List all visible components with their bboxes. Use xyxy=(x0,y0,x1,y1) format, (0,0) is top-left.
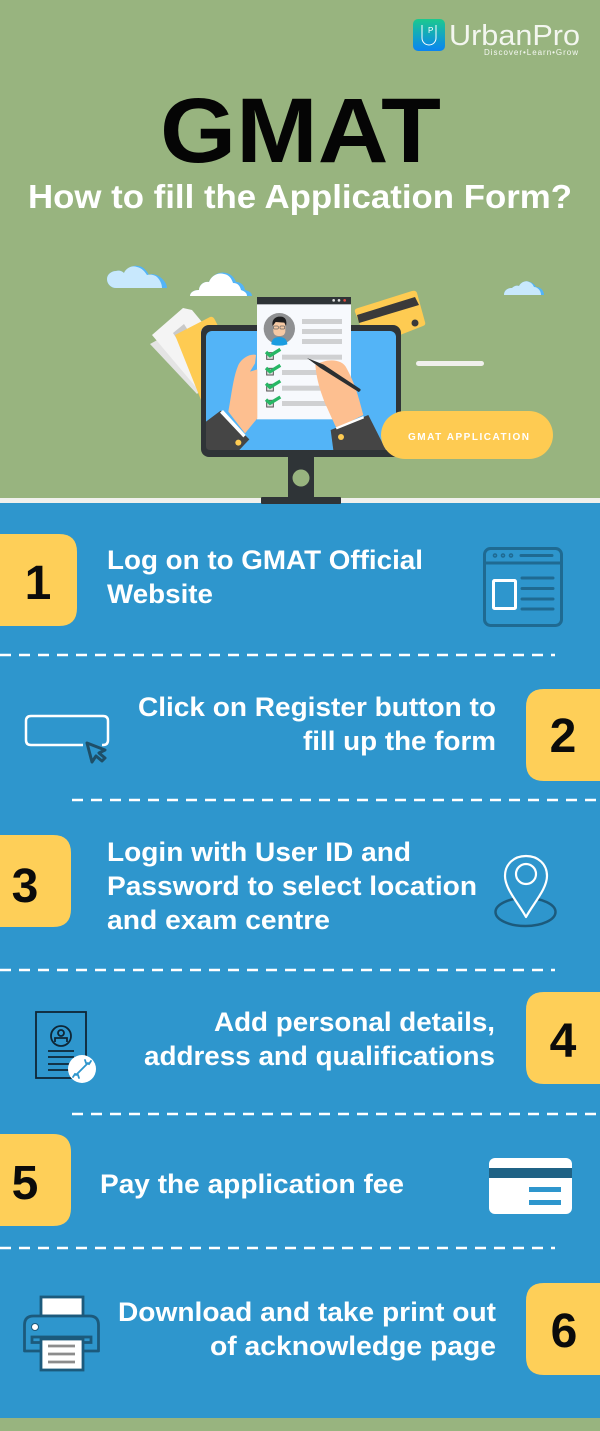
badge 1: 1 xyxy=(25,557,51,610)
monitor xyxy=(201,325,401,504)
step 1 text xyxy=(107,545,423,609)
decorative bar xyxy=(416,361,484,366)
step 3 text: and exam centre xyxy=(107,905,330,935)
right hand xyxy=(315,360,386,450)
step 6 text xyxy=(118,1297,496,1361)
step 2 text: fill up the form xyxy=(303,726,496,756)
step 5 xyxy=(0,1134,572,1226)
step 3 text: Login with User ID and xyxy=(107,837,411,867)
button: GMAT application: GMAT APPLICATION xyxy=(408,432,529,443)
step 3 text xyxy=(107,837,477,935)
pen xyxy=(307,358,361,392)
cloud: centre xyxy=(190,273,252,296)
logo: UrbanPro: Discover•Learn•Grow xyxy=(484,48,578,57)
step 1 text: Log on to GMAT Official xyxy=(107,545,423,575)
badge 1 xyxy=(0,534,77,626)
step 2 xyxy=(26,689,600,781)
badge 5: 5 xyxy=(12,1157,38,1210)
step 4 text: Add personal details, xyxy=(214,1007,495,1037)
badge 3: 3 xyxy=(12,860,38,913)
badge 2: 2 xyxy=(550,710,576,763)
logo: UrbanPro: P xyxy=(428,26,433,35)
icon: printer xyxy=(24,1297,98,1370)
badge 4: 4 xyxy=(550,1015,577,1068)
icon: payment card xyxy=(489,1158,572,1214)
step 6 text: Download and take print out xyxy=(118,1297,496,1327)
step 3 text: Password to select location xyxy=(107,871,477,901)
step 1 xyxy=(0,534,562,626)
form and hands illustration xyxy=(206,297,386,450)
icon: button and cursor xyxy=(26,716,108,762)
badge 5 xyxy=(0,1134,71,1226)
step 6 text: of acknowledge page xyxy=(210,1331,496,1361)
step 6 xyxy=(24,1283,600,1375)
badge 6: 6 xyxy=(551,1305,577,1358)
step 4 text: address and qualifications xyxy=(144,1041,495,1071)
avatar xyxy=(264,313,295,346)
step 2 text xyxy=(138,692,496,756)
badge 2 xyxy=(526,689,600,781)
icon: location pin xyxy=(496,856,556,926)
step 2 text: Click on Register button to xyxy=(138,692,496,722)
logo: UrbanPro xyxy=(413,19,580,57)
badge 6 xyxy=(526,1283,600,1375)
credit card xyxy=(355,291,425,335)
step 5 text: Pay the application fee xyxy=(100,1169,404,1199)
documents and folder xyxy=(150,308,220,400)
left hand xyxy=(206,355,257,450)
icon: browser window xyxy=(484,548,562,626)
badge 4 xyxy=(526,992,600,1084)
cloud: right xyxy=(504,281,544,295)
icon: profile document xyxy=(36,1012,96,1083)
step 3 xyxy=(0,835,556,935)
title: GMAT xyxy=(160,80,441,182)
badge 3 xyxy=(0,835,71,927)
cloud: left xyxy=(107,266,167,288)
step 4 xyxy=(36,992,600,1084)
button: GMAT application xyxy=(381,411,553,459)
logo: UrbanPro: UrbanPro xyxy=(449,20,580,52)
form sheet xyxy=(257,297,351,419)
step 4 text xyxy=(144,1007,495,1071)
checklist xyxy=(266,349,280,407)
subtitle: How to fill the Application Form? xyxy=(28,178,572,215)
step 1 text: Website xyxy=(107,579,213,609)
